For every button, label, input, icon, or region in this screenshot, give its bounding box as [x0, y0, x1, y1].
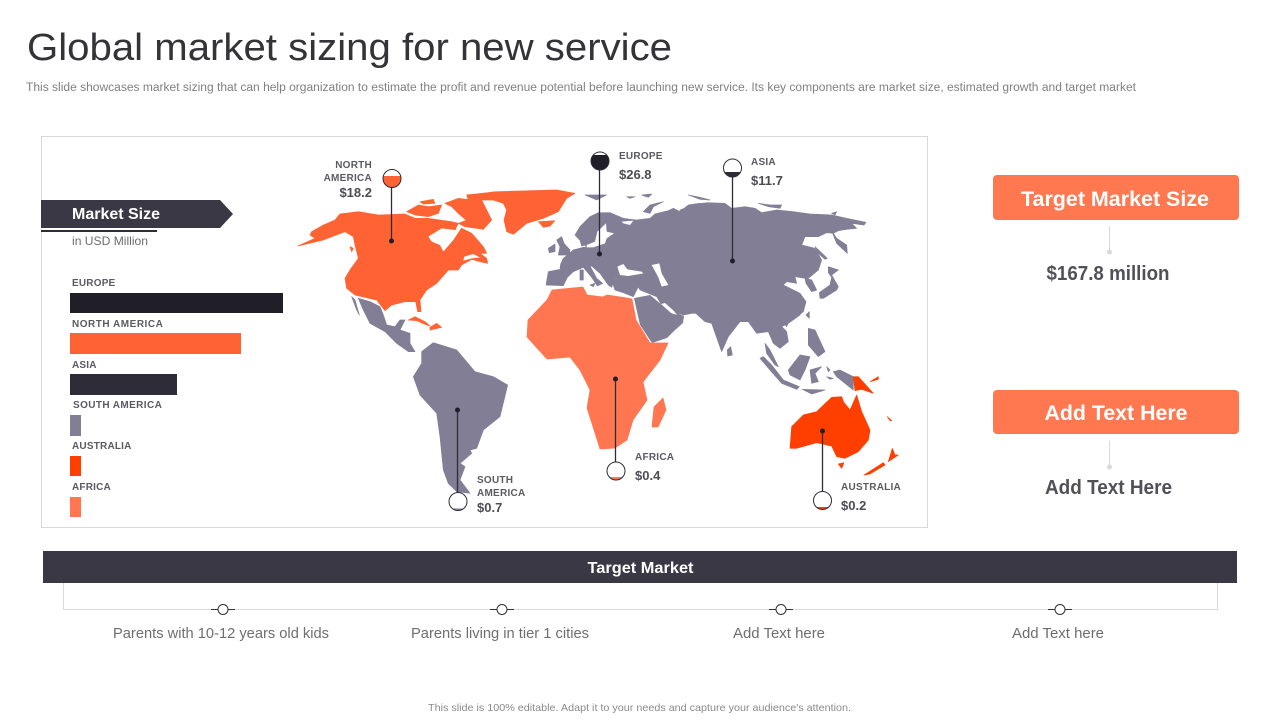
pin: Africa: [604, 376, 674, 483]
callout: add text here: Add Text Here: [1045, 477, 1172, 499]
pin: Europe: EUROPE: [619, 151, 663, 162]
map: South-East Asia islands: [760, 328, 853, 394]
callout: target market size: $167.8 million: [1046, 263, 1170, 285]
target item: parents with kids: Parents with 10-12 years old kids: [113, 626, 329, 642]
bar chart: market size by region: ASIA: [72, 360, 97, 371]
bar chart: market size by region: SOUTH AMERICA: [73, 400, 162, 411]
pin: Australia: AUSTRALIA: [841, 482, 901, 493]
map: South America: [413, 343, 508, 493]
map: Arabia: [634, 295, 684, 343]
target item: parents with kids: [113, 604, 329, 642]
map: North and East Asia: [680, 195, 866, 320]
pin: South America: AMERICA: [477, 488, 525, 499]
pin: South America: $0.7: [477, 500, 502, 515]
pin: North America: AMERICA: [324, 173, 372, 184]
target market header: [43, 551, 1237, 583]
target market bracket: [64, 583, 1218, 610]
target item: add text 2: [1012, 604, 1104, 642]
title: Global market sizing for new service: [27, 27, 672, 69]
map: South Asia: [667, 280, 809, 367]
map: Persian Gulf: [661, 303, 677, 315]
callout: target market size: [993, 175, 1239, 285]
pin: North America: $18.2: [339, 185, 372, 200]
map: Australia and Oceania: [790, 377, 898, 475]
pin: Africa: AFRICA: [635, 452, 674, 463]
target item: tier 1 cities: [411, 604, 589, 642]
pin: Europe: [588, 151, 663, 256]
panel: market size map: [42, 136, 928, 528]
pin: South America: SOUTH: [477, 475, 513, 486]
bar chart: market size by region: [70, 278, 283, 517]
map: Greenland and Iceland: [467, 190, 575, 234]
bar chart: market size by region: NORTH AMERICA: [72, 319, 163, 330]
bar chart: market size by region: AFRICA: [72, 482, 111, 493]
callout: add text here: Add Text Here: [1044, 402, 1188, 425]
pin: Australia: $0.2: [841, 498, 866, 513]
target item: add text 1: [733, 604, 825, 642]
pin: North America: [324, 160, 404, 244]
map: Europe and West Asia: [546, 194, 700, 313]
pin: South America: [446, 408, 525, 515]
bar chart: market size by region: EUROPE: [72, 278, 116, 289]
target item: tier 1 cities: Parents living in tier 1 cities: [411, 626, 589, 642]
pin: Europe: $26.8: [619, 167, 652, 182]
map: Caribbean islands: [408, 317, 442, 330]
map: Africa: [527, 287, 668, 449]
target market header: Target Market: [588, 560, 694, 577]
callout: target market size: Target Market Size: [1021, 188, 1209, 211]
subtitle: This slide showcases market sizing that can help organization to estimate the profit and revenue potential before launching new service. Its key components are market size, estimated growth and target market: [26, 82, 1137, 94]
world map: [298, 190, 898, 493]
pin: Australia: [810, 428, 901, 513]
unit note: in USD Million: [72, 234, 148, 248]
map: North America: [298, 192, 495, 312]
pin: Asia: [720, 157, 783, 264]
map: Mexico and Central America: [352, 297, 415, 352]
pin: Asia: ASIA: [751, 157, 776, 168]
target item: add text 2: Add Text here: [1012, 626, 1104, 642]
market size ribbon: [41, 200, 233, 232]
pin: Africa: $0.4: [635, 468, 661, 483]
pin: North America: NORTH: [335, 160, 372, 171]
callout: add text here: [993, 390, 1239, 499]
pin: Asia: $11.7: [751, 173, 783, 188]
market size ribbon: Market Size: [72, 206, 160, 223]
bar chart: market size by region: AUSTRALIA: [72, 441, 132, 452]
target item: add text 1: Add Text here: [733, 626, 825, 642]
footer note: This slide is 100% editable. Adapt it to your needs and capture your audience's attention.: [428, 702, 851, 714]
